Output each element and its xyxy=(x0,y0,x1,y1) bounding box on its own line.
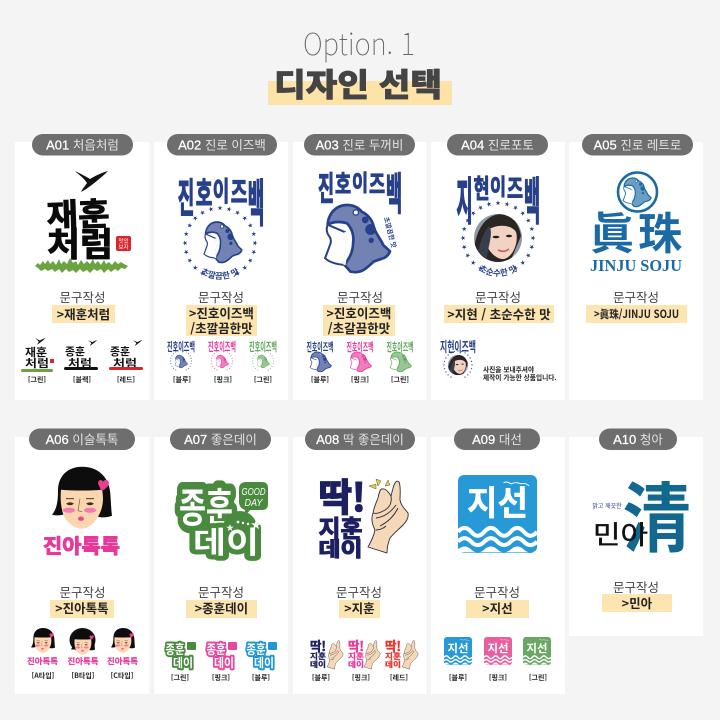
logo: 眞珠 JINJU SOJU: 眞 xyxy=(590,198,634,262)
logo: 진호이즈백 with frog: 호 xyxy=(196,169,212,214)
logo: 재훈처럼 xyxy=(35,171,131,273)
thumbnail: 블루 xyxy=(306,338,334,385)
label: 문구작성: 문구작성 xyxy=(59,582,106,601)
thumbnail: 레드: [레드] xyxy=(390,673,408,683)
wording highlight: >진호이즈백 xyxy=(327,303,391,322)
thumbnail: 레드 xyxy=(385,636,418,683)
pill: A09: A09 대선 xyxy=(472,432,522,447)
logo: 眞珠 JINJU SOJU: 珠 xyxy=(638,198,682,262)
thumbnail: 핑크: [핑크] xyxy=(214,375,232,385)
thumbnail: 블루: 진호이즈백 xyxy=(167,337,195,355)
logo: 진호이즈백 with large frog: 백 xyxy=(386,158,402,223)
pill: A05: A05 진로 레트로 xyxy=(594,138,681,152)
thumbnail: 핑크: 데이 xyxy=(348,659,364,670)
logo: 재훈처럼: 맛있 xyxy=(118,237,129,245)
thumbnail: 블루 xyxy=(167,337,195,385)
label: 문구작성: 문구작성 xyxy=(337,287,383,306)
thumbnail: 그린: [그린] xyxy=(391,375,409,385)
thumbnail: 그린: [그린] xyxy=(254,375,272,385)
wording highlight: >지현 / 초순수한 맛 xyxy=(447,304,551,323)
panel: A08 xyxy=(293,428,426,694)
thumbnail: 핑크: [핑크] xyxy=(212,673,230,683)
logo: 딱! 지훈 데이 with hand: 지훈 xyxy=(318,509,362,544)
thumbnail: 레드: 종훈 xyxy=(110,344,130,359)
pill: A01 xyxy=(32,134,133,156)
thumbnail: 레드: [레드] xyxy=(117,375,135,385)
thumbnail: 레드: 데이 xyxy=(385,659,401,670)
logo: 眞珠 JINJU SOJU xyxy=(590,172,682,275)
thumbnail: B타입: 진아톡톡 xyxy=(68,656,98,667)
thumbnail: 그린: [그린] xyxy=(171,673,189,683)
logo: 민아 清: 清 xyxy=(623,457,690,568)
pill: A03 xyxy=(304,134,415,156)
logo: 진호이즈백 with frog: 이 xyxy=(213,169,229,209)
thumbnail: 블루: 딱! xyxy=(310,636,326,655)
pill: A05 xyxy=(582,134,693,156)
wording highlight: /초갈끔한맛 xyxy=(328,318,391,337)
thumbnail: C타입: 진아톡톡 xyxy=(107,656,138,667)
thumbnail: 블루: [블루] xyxy=(252,673,270,683)
logo: 진호이즈백 with large frog: 진 xyxy=(318,161,334,210)
thumbnail: 블루: [블루] xyxy=(312,673,330,683)
thumbnail: 핑크: [핑크] xyxy=(351,375,369,385)
thumbnail: 그린 xyxy=(166,639,196,683)
thumbnail: 핑크: 진호이즈백 xyxy=(208,337,236,355)
wording highlight xyxy=(602,593,672,612)
thumbnail: A타입: 진아톡톡 xyxy=(27,656,58,667)
wording highlight: >진아톡톡 xyxy=(55,598,109,617)
thumbnail: 블랙: [블랙] xyxy=(73,375,91,385)
pill: A04 xyxy=(447,134,548,156)
thumbnail: 핑크: 종훈 xyxy=(206,639,226,658)
logo: 지현이즈백 with photo: 초순수한 맛 xyxy=(478,264,517,277)
thumbnail: 그린 xyxy=(386,338,414,385)
label: 문구작성: 문구작성 xyxy=(613,577,659,596)
thumbnail: 블루: 지훈 xyxy=(310,651,327,662)
panel: A10 xyxy=(569,428,703,636)
pill: A03: A03 진로 두꺼비 xyxy=(316,138,403,152)
thumbnail: 블루 xyxy=(444,637,472,683)
logo: 지선 blue square: 지선 xyxy=(467,476,528,525)
panel: A09 xyxy=(431,428,565,694)
panel: A05 xyxy=(569,134,703,400)
logo: 진호이즈백 with large frog xyxy=(318,158,402,272)
thumbnail: photo logo: 지현이즈백 xyxy=(440,337,476,357)
logo: 진호이즈백 with frog: 백 xyxy=(248,162,264,236)
pill: A07: A07 좋은데이 xyxy=(184,432,257,447)
thumbnail: 블랙: 종훈 xyxy=(65,344,85,359)
logo: 진호이즈백 with frog: 초깔끔한 맛 xyxy=(200,268,239,280)
thumbnail: 그린: [그린] xyxy=(529,673,547,683)
label: 문구작성: 문구작성 xyxy=(59,287,106,306)
thumbnail: 그린 xyxy=(523,637,551,683)
panel: A06 xyxy=(15,428,150,694)
wording highlight: >지훈 xyxy=(344,598,375,617)
logo: 딱! 지훈 데이 with hand xyxy=(318,467,408,562)
thumbnail: 핑크: [핑크] xyxy=(352,673,370,683)
thumbnail: 블루: 데이 xyxy=(310,659,326,670)
logo: 지선 blue square xyxy=(458,475,537,553)
logo: 민아 清: 민아 xyxy=(593,515,648,552)
thumbnail: 그린: [그린] xyxy=(28,375,46,385)
thumbnail: 핑크 xyxy=(484,637,512,683)
label: 문구작성: 문구작성 xyxy=(198,582,244,601)
thumbnail: 핑크 xyxy=(348,636,380,683)
logo: 민아 清: 맑고 깨끗한 xyxy=(592,501,622,510)
thumbnail: 그린 xyxy=(249,337,277,385)
thumbnail: 그린 xyxy=(21,338,54,385)
pill: A06: A06 이슬톡톡 xyxy=(46,432,118,447)
pill: A08: A08 딱 좋은데이 xyxy=(316,432,404,447)
heading: 디자인 선택 with highlight: 디자인 선택 xyxy=(274,60,442,106)
logo: 종훈데이 sticker: 데이 xyxy=(193,518,259,562)
pill: A01: A01 처음처럼 xyxy=(46,138,119,152)
thumbnail: 블루: [블루] xyxy=(311,375,329,385)
note: photo required: 제작이 가능한 상품입니다. xyxy=(483,372,557,382)
thumbnail: A타입 xyxy=(27,628,58,681)
thumbnail: C타입 xyxy=(107,628,138,681)
thumbnail: 그린: 진호이즈백 xyxy=(249,337,277,355)
label: 문구작성: 문구작성 xyxy=(198,287,244,306)
wording highlight: >민아 xyxy=(622,593,653,612)
panel: A03 xyxy=(293,134,426,400)
thumbnail: 핑크 xyxy=(208,337,236,385)
logo: 지현이즈백 with photo: 이 xyxy=(490,168,506,202)
logo: 지현이즈백 with photo: 백 xyxy=(524,162,540,234)
logo: 지현이즈백 with photo: 지 xyxy=(456,162,473,234)
thumbnail: 핑크: 지선 xyxy=(488,640,508,656)
thumbnail: A타입: [A타입] xyxy=(32,671,54,681)
pill: A10: A10 청아 xyxy=(613,432,663,447)
logo: 진호이즈백 with large frog: 즈 xyxy=(369,165,385,201)
thumbnail: B타입 xyxy=(68,628,98,681)
logo: 딱! 지훈 데이 with hand: 딱! xyxy=(318,467,366,522)
thumbnail: C타입: [C타입] xyxy=(111,671,133,681)
logo: 종훈데이 sticker xyxy=(179,475,268,562)
panel: A01 xyxy=(15,134,150,400)
thumbnail: 블루: 지선 xyxy=(448,640,468,656)
logo: 지현이즈백 with photo: 현 xyxy=(473,169,490,206)
thumbnail: 블루 xyxy=(246,639,277,683)
logo: 민아 清 xyxy=(592,457,690,568)
thumbnail: 그린: 진호이즈백 xyxy=(386,338,414,355)
panel: A04 xyxy=(431,134,565,400)
thumbnail: 레드: 지훈 xyxy=(385,651,402,662)
logo: 종훈데이 sticker: GOOD xyxy=(242,487,266,498)
label: 문구작성: 문구작성 xyxy=(475,287,521,306)
thumbnail: 블루: 데이 xyxy=(254,654,274,671)
wording highlight: >眞珠/JINJU SOJU xyxy=(594,306,679,322)
thumbnail: 레드: 딱! xyxy=(385,636,401,655)
thumbnail: 그린: 처럼 xyxy=(25,355,49,371)
thumbnail: 핑크 xyxy=(206,639,237,683)
logo: 진호이즈백 with large frog: 초깔끔한 맛 xyxy=(382,216,400,249)
note: photo required: 사진을 보내주셔야 xyxy=(483,364,534,374)
thumbnail: 레드: 처럼 xyxy=(113,355,137,371)
logo: 진호이즈백 with frog: 진 xyxy=(178,165,194,223)
pill: A09 xyxy=(454,428,540,450)
panel: A07 xyxy=(154,428,288,694)
logo: 진호이즈백 with large frog: 이 xyxy=(352,164,368,198)
wording highlight: >종훈데이 xyxy=(195,598,248,617)
logo: 지현이즈백 with photo: 즈 xyxy=(507,169,523,206)
thumbnail: 핑크: 진호이즈백 xyxy=(346,338,374,355)
thumbnail: 블루: 종훈 xyxy=(246,639,266,658)
logo: 종훈데이 sticker: DAY xyxy=(244,498,264,509)
thumbnail: 핑크: 지훈 xyxy=(348,651,365,662)
thumbnail: 블루: [블루] xyxy=(173,375,191,385)
logo: 진아톡톡 with girl face: 진아톡톡 xyxy=(43,530,120,559)
thumbnail: 그린: 종훈 xyxy=(166,639,185,658)
label: 문구작성: 문구작성 xyxy=(336,582,382,601)
label: 문구작성: 문구작성 xyxy=(613,287,659,306)
title: Option. 1: Option. 1 xyxy=(303,20,415,64)
thumbnail: 그린: 지선 xyxy=(526,640,548,656)
logo: 재훈처럼: 재훈 xyxy=(46,189,110,237)
pill: A04: A04 진로포토 xyxy=(461,138,534,152)
thumbnail: photo logo xyxy=(440,337,476,379)
wording highlight xyxy=(186,303,257,337)
thumbnail: 핑크: 딱! xyxy=(348,636,364,655)
thumbnail: 블랙 xyxy=(64,340,98,385)
logo: 지현이즈백 with photo xyxy=(456,162,540,277)
wording highlight: /초깔끔한맛 xyxy=(190,318,253,337)
pill: A02 xyxy=(167,134,277,156)
pill: A07 xyxy=(170,428,271,450)
wording highlight: >지선 xyxy=(482,598,513,617)
wording highlight xyxy=(323,303,395,337)
logo: 진호이즈백 with frog xyxy=(178,162,264,280)
logo: 재훈처럼: 처럼 xyxy=(47,218,113,266)
wording highlight: >재훈처럼 xyxy=(57,304,110,323)
note: photo required xyxy=(483,364,557,382)
logo: 眞珠 JINJU SOJU: JINJU SOJU xyxy=(590,256,682,275)
logo: 진호이즈백 with frog: 즈 xyxy=(231,169,247,211)
pill: A02: A02 진로 이즈백 xyxy=(178,138,266,152)
logo: 재훈처럼: 보자 xyxy=(118,243,129,251)
logo: 딱! 지훈 데이 with hand: 데이 xyxy=(318,533,362,562)
pill: A06 xyxy=(29,428,135,450)
logo: 진아톡톡 with girl face xyxy=(43,467,120,559)
thumbnail: 핑크: [핑크] xyxy=(489,673,507,683)
thumbnail: 핑크: 데이 xyxy=(214,654,234,671)
thumbnail: 블랙: 처럼 xyxy=(68,355,92,371)
thumbnail: 블루 xyxy=(310,636,343,683)
thumbnail: 블루: [블루] xyxy=(449,673,467,683)
pill: A10 xyxy=(599,428,677,450)
wording highlight xyxy=(466,598,529,618)
panel: A02 xyxy=(154,134,288,400)
thumbnail: 레드 xyxy=(109,340,143,385)
wording highlight: >진호이즈백 xyxy=(189,303,254,322)
thumbnail: 그린: 데이 xyxy=(173,654,193,671)
logo: 종훈데이 sticker: 종훈 xyxy=(179,475,233,534)
thumbnail: 그린: 재훈 xyxy=(25,344,47,360)
thumbnail: B타입: [B타입] xyxy=(72,671,94,681)
pill: A08 xyxy=(305,428,415,450)
thumbnail: 핑크 xyxy=(346,338,374,385)
label: 문구작성: 문구작성 xyxy=(474,582,520,601)
thumbnail: 블루: 진호이즈백 xyxy=(306,338,334,355)
logo: 진호이즈백 with large frog: 호 xyxy=(335,165,351,201)
